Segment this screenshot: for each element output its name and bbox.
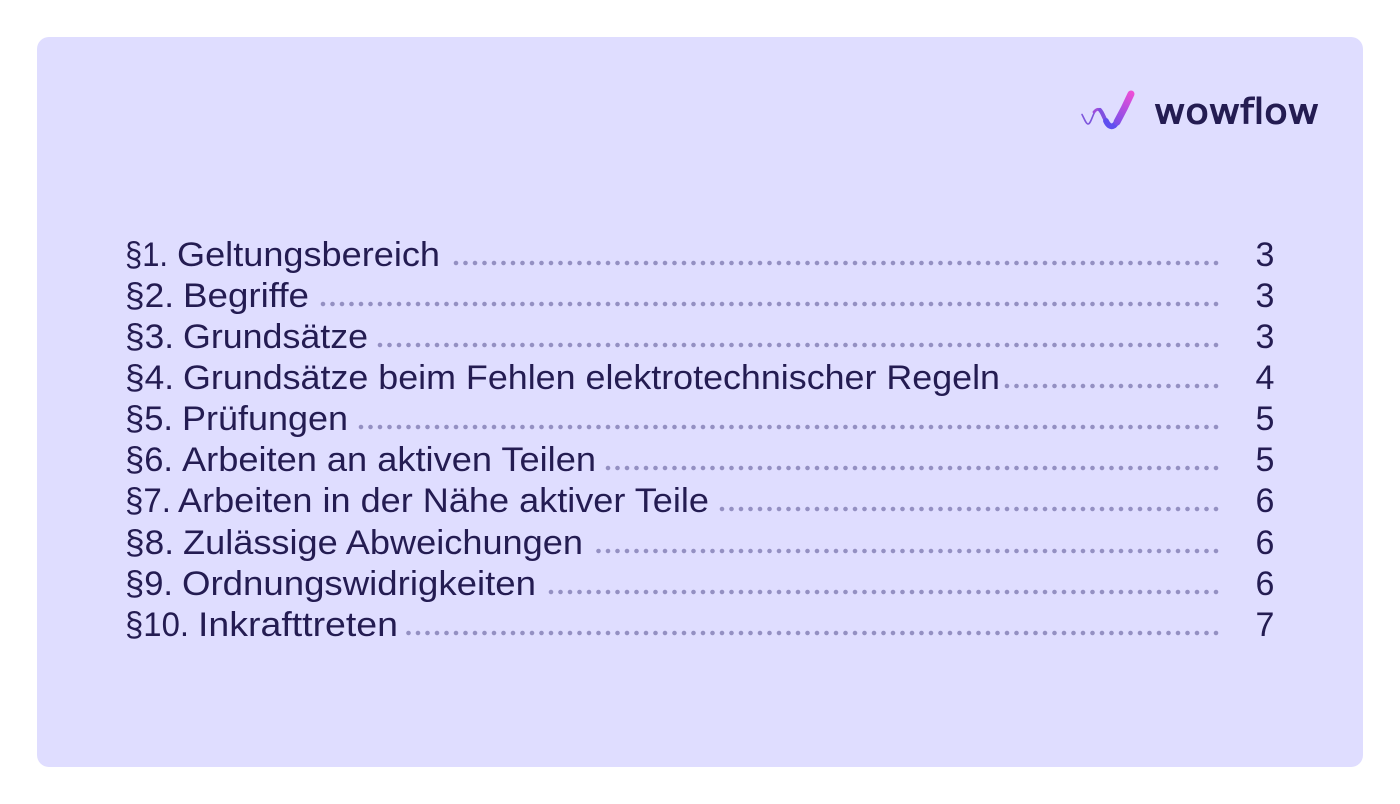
entry 5: §5. [125,400,173,438]
entry 7: Arbeiten in der Nähe aktiver Teile [178,482,709,520]
entry 9: §9. [125,565,173,603]
table of contents [125,236,1274,644]
entry 3: Grundsätze [183,318,368,356]
logo wordmark: wowflow [1154,92,1319,132]
entry 10: Inkrafttreten [198,606,398,644]
entry 9: 6 [1256,565,1274,603]
entry 1: §1. [125,236,168,274]
entry 2: §2. [125,277,174,315]
entry 5 [125,400,1274,438]
entry 1: 3 [1256,236,1274,274]
entry 4 [125,359,1274,397]
entry 8 [125,524,1274,562]
entry 4: §4. [125,359,174,397]
entry 9 [125,565,1274,603]
entry 4: Grundsätze beim Fehlen elektrotechnischer Regeln [183,359,1000,397]
entry 6 [125,441,1274,479]
icon: wave check mark [1082,94,1131,126]
entry 6: §6. [125,441,173,479]
entry 7: §7. [125,482,171,520]
entry 10: §10. [125,606,189,644]
entry 6: 5 [1256,441,1274,479]
entry 1 [125,236,1274,274]
entry 2: Begriffe [183,277,309,315]
entry 8: Zulässige Abweichungen [183,524,583,562]
entry 8: §8. [125,524,174,562]
logo: wowflow [1082,92,1319,132]
entry 6: Arbeiten an aktiven Teilen [182,441,596,479]
entry 7: 6 [1256,482,1274,520]
entry 8: 6 [1256,524,1274,562]
entry 3: 3 [1256,318,1274,356]
entry 9: Ordnungswidrigkeiten [182,565,536,603]
entry 5: Prüfungen [182,400,348,438]
entry 3 [125,318,1274,356]
entry 7 [125,482,1274,520]
entry 2: 3 [1256,277,1274,315]
entry 1: Geltungsbereich [177,236,440,274]
entry 2 [125,277,1274,315]
entry 5: 5 [1256,400,1274,438]
entry 3: §3. [125,318,174,356]
entry 10 [125,606,1274,644]
entry 4: 4 [1256,359,1274,397]
entry 10: 7 [1256,606,1274,644]
